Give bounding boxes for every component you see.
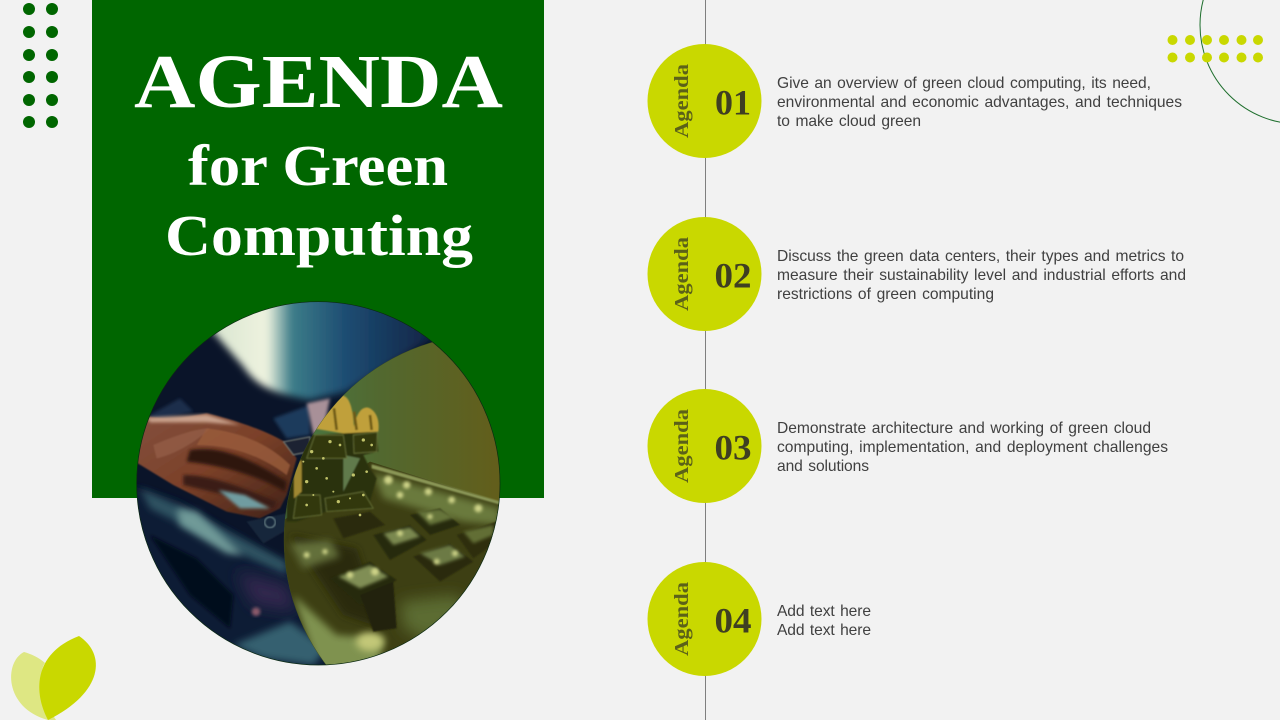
title: for Green (188, 133, 448, 198)
agenda item 01: Agenda (671, 64, 693, 138)
agenda item 02: Discuss the green data centers, their types and metrics to (777, 248, 1184, 265)
photo: hands on circuit board in circle (136, 301, 500, 666)
timeline line (704, 0, 706, 720)
agenda item 03: computing, implementation, and deployment challenges (777, 439, 1168, 456)
agenda item 04: 04 (714, 600, 752, 640)
agenda item 03: Demonstrate architecture and working of green cloud (777, 420, 1151, 437)
agenda item 03 (648, 389, 1168, 503)
agenda item 04: Agenda (671, 582, 693, 656)
agenda item 02: measure their sustainability level and industrial efforts and (777, 267, 1186, 284)
agenda item 03: 03 (714, 428, 752, 468)
decorative dots: dark green (23, 3, 58, 128)
agenda item 01: 01 (715, 82, 751, 122)
agenda item 02: restrictions of green computing (777, 286, 994, 303)
agenda item 02 (648, 217, 1186, 331)
leaves icon (11, 636, 96, 720)
title: AGENDA (134, 40, 503, 124)
agenda item 01: Give an overview of green cloud computing, its need, (777, 75, 1151, 92)
agenda item 04 (648, 562, 871, 676)
panel: title block (92, 0, 544, 498)
agenda item 03: Agenda (671, 409, 693, 483)
agenda item 01: to make cloud green (777, 113, 921, 130)
agenda item 02: Agenda (671, 237, 693, 311)
agenda item 02: 02 (714, 256, 752, 296)
agenda item 01: environmental and economic advantages, and techniques (777, 94, 1182, 111)
agenda item 01 (648, 44, 1182, 158)
decorative dots: lime (1168, 35, 1263, 62)
agenda item 04: Add text here (777, 603, 871, 620)
title (134, 40, 503, 268)
decorative arc (1200, 0, 1280, 124)
title: Computing (165, 203, 473, 268)
agenda item 03: and solutions (777, 458, 869, 475)
agenda item 04: Add text here (777, 622, 871, 639)
